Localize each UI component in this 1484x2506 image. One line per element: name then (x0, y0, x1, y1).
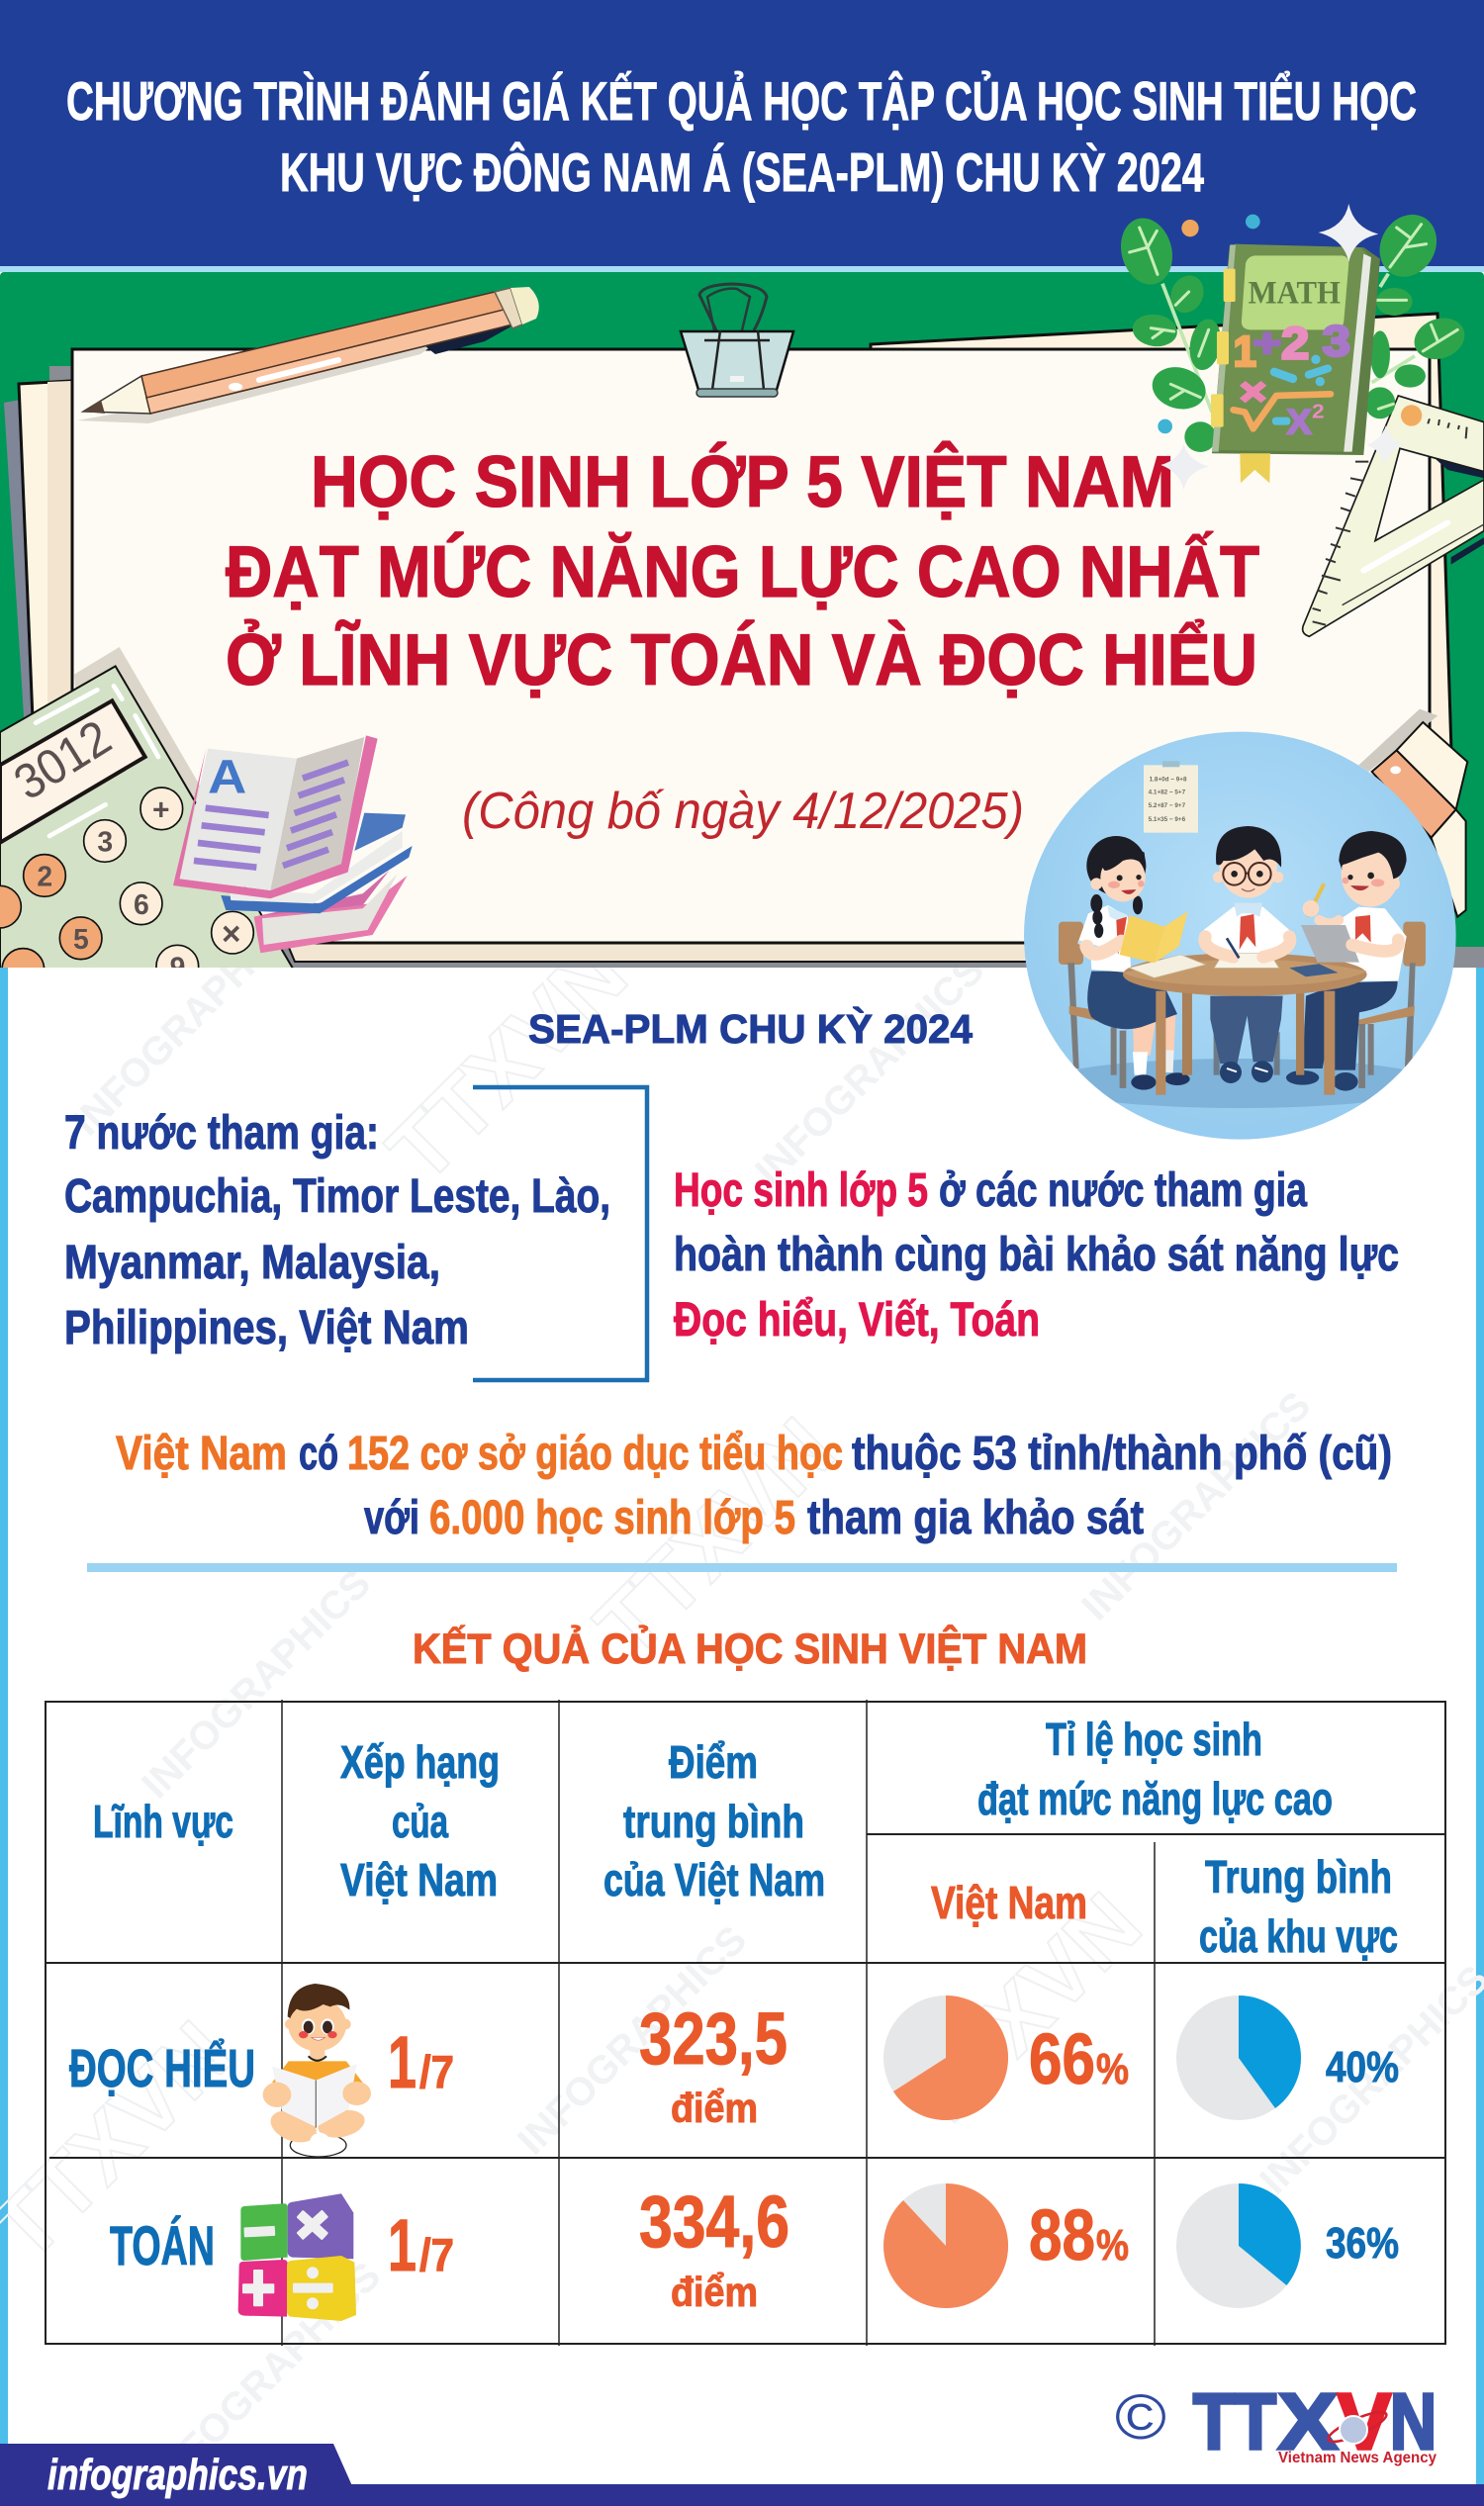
icon: math book with leaves (1114, 204, 1470, 490)
wall note: 1.8+0d − 9+8 (1150, 776, 1187, 783)
wall note: 5.1×35 − 9+6 (1149, 816, 1186, 823)
table header (93, 1714, 1398, 1962)
table header: Trung bình (1205, 1851, 1392, 1903)
watermarks: TTXVN (369, 925, 646, 1201)
illustration: students around a table (1024, 732, 1456, 1140)
watermarks: INFOGRAPHICS (1073, 1383, 1319, 1628)
icon: binder clip (681, 284, 793, 397)
table header: của khu vực (1199, 1910, 1398, 1962)
text block: Vietnam sample: có (299, 1428, 338, 1480)
results table (46, 1700, 1445, 2346)
text block: Vietnam sample: tham gia khảo sát (807, 1492, 1144, 1544)
table header: của Việt Nam (603, 1854, 825, 1905)
pie chart: region 40% (1176, 1996, 1399, 2120)
table header: của (392, 1796, 448, 1847)
icon: calculator: + (152, 793, 170, 826)
main title (66, 70, 1417, 203)
text block: participating countries: 7 nước tham gia: (64, 1107, 379, 1160)
rank: /7 (419, 2046, 454, 2097)
book body: 3 (1323, 318, 1350, 365)
logo: TTXVN: V (1338, 2377, 1391, 2465)
text block: Vietnam sample: Việt Nam (116, 1428, 287, 1480)
icon: calculator (0, 647, 294, 990)
pie chart: Vietnam 66% (883, 1996, 1129, 2120)
copyright mark: © (1115, 2381, 1166, 2453)
bracket divider (473, 1087, 647, 1380)
pie chart: Vietnam 88%: 88 (1029, 2196, 1095, 2275)
icon: calculator: 9 (170, 952, 185, 983)
rank (388, 2021, 454, 2103)
score: 323,5 (639, 1997, 788, 2080)
icon: calculator: 6 (134, 889, 149, 921)
text block: Vietnam sample: 6.000 học sinh lớp 5 (429, 1492, 795, 1544)
text block: survey: ở các nước tham gia (939, 1164, 1307, 1217)
table header: Xếp hạng (340, 1736, 500, 1788)
book body: + (1253, 322, 1281, 365)
heading: HỌC SINH LỚP 5 VIỆT NAM (311, 442, 1174, 522)
table (1123, 953, 1367, 1095)
book body: 2 (1281, 319, 1309, 369)
watermarks: INFOGRAPHICS (134, 1561, 379, 1807)
table header: Tỉ lệ học sinh (1046, 1714, 1262, 1765)
icon: calculator: 3012 (4, 709, 121, 810)
logo: TTXVN: N (1390, 2377, 1437, 2465)
watermarks: TTXVN (883, 1875, 1160, 2151)
book body (1211, 244, 1380, 483)
pie chart: Vietnam 88%: % (1096, 2221, 1129, 2270)
icon: open book on book stack (173, 735, 413, 953)
green board background (0, 272, 1484, 968)
table header: trung bình (623, 1796, 804, 1847)
book body: 2 (1312, 401, 1325, 422)
text block: survey: Đọc hiểu, Viết, Toán (674, 1294, 1040, 1346)
pie chart: region 40%: 40% (1326, 2043, 1399, 2091)
heading: Ở LĨNH VỰC TOÁN VÀ ĐỌC HIỂU (226, 620, 1257, 700)
icon: calculator: 2 (37, 862, 52, 893)
watermarks: INFOGRAPHICS (747, 948, 992, 1193)
logo: TTXVN: TT (1193, 2377, 1276, 2465)
watermarks: INFOGRAPHICS (510, 1917, 755, 2163)
watermarks: TTXVN (577, 1400, 854, 1676)
footer band (0, 2444, 1484, 2506)
icon: set square (1303, 396, 1484, 636)
table header: Việt Nam (931, 1877, 1087, 1928)
pie chart: region 36%: 36% (1326, 2219, 1399, 2268)
book body: X (1287, 403, 1312, 441)
book body: 1 (1234, 328, 1256, 376)
icon: math cubes (238, 2193, 356, 2321)
score (639, 2181, 789, 2315)
pie chart: Vietnam 88% (883, 2183, 1129, 2308)
score (639, 1997, 788, 2131)
pie chart: region 36% (1176, 2183, 1399, 2308)
wall note: 5.2+87 − 9+7 (1149, 802, 1186, 809)
paper stack (4, 314, 1484, 968)
icon: calculator: 3 (97, 827, 113, 859)
watermarks: INFOGRAPHICS (64, 898, 310, 1144)
text block: participating countries: Campuchia, Timor Leste, Lào, (64, 1170, 610, 1223)
logo: TTXVN (1193, 2377, 1437, 2466)
sparkles and dots (1158, 204, 1403, 490)
wall note: 4.1+82 − 5+7 (1149, 789, 1186, 796)
logo: TTXVN: X (1278, 2377, 1338, 2465)
text block: survey: Học sinh lớp 5 (674, 1164, 928, 1217)
text block: participating countries: Myanmar, Malaysia, (64, 1237, 440, 1289)
pie chart: Vietnam 66%: % (1096, 2045, 1129, 2093)
leaves (1114, 204, 1470, 452)
logo: TTXVN: Vietnam News Agency (1278, 2450, 1437, 2466)
score: 334,6 (639, 2181, 789, 2263)
table header: Việt Nam (340, 1854, 498, 1905)
text block: participating countries: Philippines, Việt Nam (64, 1302, 469, 1354)
rank: /7 (419, 2229, 454, 2280)
row: math (110, 2181, 1399, 2321)
icon: calculator: 5 (73, 924, 89, 956)
score: điểm (671, 2085, 758, 2131)
text block: participating countries (64, 1107, 610, 1354)
student: boy with tablet (1286, 831, 1407, 1091)
chairs (1059, 922, 1426, 1088)
text block: survey (674, 1164, 1399, 1346)
table header: Lĩnh vực (93, 1796, 233, 1847)
side borders (0, 968, 1484, 2484)
icon: calculator: × (222, 916, 240, 953)
section title: results: KẾT QUẢ CỦA HỌC SINH VIỆT NAM (413, 1624, 1087, 1673)
icon: end of ruler (1358, 709, 1467, 917)
heading (226, 442, 1259, 700)
row: reading: ĐỌC HIỂU (69, 2039, 255, 2098)
rank (388, 2204, 454, 2286)
text block: Vietnam sample: với (364, 1492, 419, 1544)
wall note (1144, 761, 1198, 833)
publication date: (Công bố ngày 4/12/2025) (462, 783, 1024, 840)
row: math: TOÁN (110, 2214, 215, 2276)
student: girl (1077, 836, 1190, 1090)
header banner (0, 0, 1484, 272)
section title: SEA-PLM: SEA-PLM CHU KỲ 2024 (528, 1006, 973, 1052)
watermarks: INFOGRAPHICS (143, 2254, 389, 2499)
table header: Điểm (669, 1736, 758, 1788)
rank: 1 (388, 2021, 417, 2103)
text block: Vietnam sample: 152 cơ sở giáo dục tiểu học (347, 1428, 843, 1480)
student: boy with glasses (1204, 826, 1289, 1083)
table grid (46, 1700, 1445, 2346)
pie chart: Vietnam 66%: 66 (1029, 2020, 1095, 2099)
icon: pencil (77, 287, 539, 423)
book body: × (1240, 371, 1266, 412)
icon: boy reading (263, 1984, 371, 2157)
hands and held items (1086, 883, 1399, 963)
watermarks (0, 898, 1484, 2499)
website: infographics.vn (47, 2451, 308, 2499)
text block: Vietnam sample: thuộc 53 tỉnh/thành phố (cũ) (852, 1428, 1392, 1480)
icon: open book on book stack: A (208, 751, 246, 804)
rank: 1 (388, 2204, 417, 2286)
book body: MATH (1249, 276, 1341, 312)
heading: ĐẠT MỨC NĂNG LỰC CAO NHẤT (226, 532, 1259, 612)
score: điểm (671, 2269, 758, 2315)
row: reading (69, 1984, 1399, 2157)
text block: Vietnam sample (116, 1428, 1392, 1544)
table header: đạt mức năng lực cao (977, 1773, 1333, 1824)
